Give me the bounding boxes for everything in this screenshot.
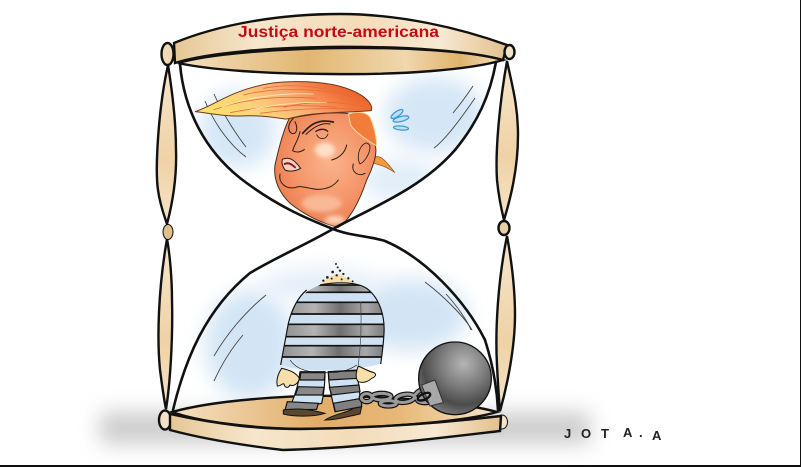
hair tuft at neck bbox=[373, 157, 395, 173]
base plate floor bbox=[172, 396, 497, 429]
blue glass tint: upper bulb bbox=[200, 77, 485, 200]
side hair bbox=[348, 112, 377, 146]
top cap inner ellipse bbox=[178, 48, 503, 74]
face bbox=[275, 113, 376, 227]
hourglass posts and knobs bbox=[157, 43, 518, 430]
legs bbox=[285, 370, 362, 412]
chain bbox=[361, 386, 432, 406]
hair swoop bbox=[195, 82, 372, 119]
facial features bbox=[280, 118, 370, 189]
title: Justiça norte-americana bbox=[238, 24, 439, 41]
shoes bbox=[283, 409, 325, 416]
signature: JOTA.A bbox=[564, 425, 662, 443]
prisoner figure bbox=[277, 263, 491, 420]
caricature head bbox=[275, 112, 395, 227]
striped uniform bbox=[281, 283, 384, 371]
ground shadow bbox=[100, 412, 590, 444]
glass reflection strokes bbox=[205, 86, 475, 381]
shackle plate bbox=[422, 380, 443, 406]
hourglass glass outline bbox=[173, 62, 498, 410]
blue glass tint: lower bulb bbox=[205, 269, 468, 400]
iron ball bbox=[419, 342, 491, 415]
icon: sweat drops bbox=[390, 108, 409, 131]
top cap band bbox=[174, 14, 507, 63]
chain end link bbox=[417, 391, 431, 402]
hands bbox=[277, 368, 299, 387]
hair tuft bbox=[320, 274, 355, 286]
base band bbox=[170, 414, 501, 450]
